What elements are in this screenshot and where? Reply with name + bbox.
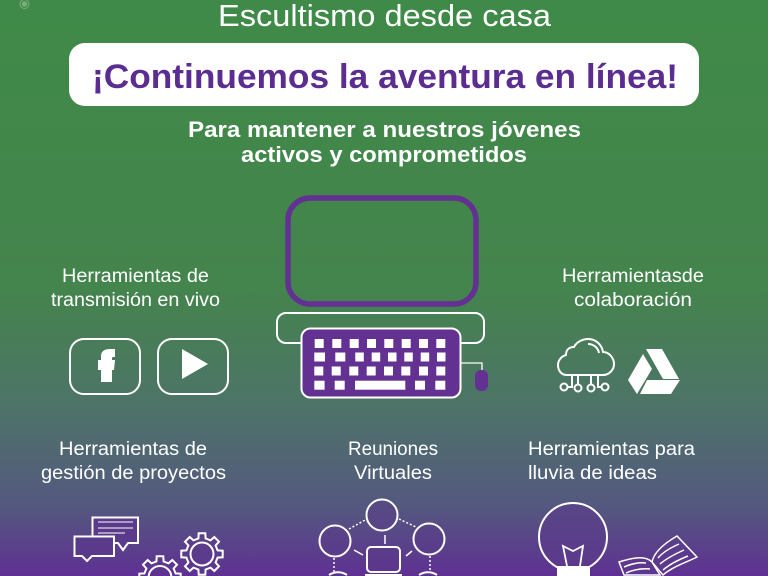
- mouse: [475, 370, 488, 391]
- keyboard: [302, 328, 460, 398]
- mouse cable: [461, 363, 482, 371]
- icon: light bulb: [539, 503, 607, 576]
- label: virtual meetings: Reuniones: [348, 439, 438, 460]
- icon: cloud network: [558, 339, 614, 392]
- section: collaboration tools: [558, 266, 704, 394]
- icon: people network: [320, 500, 444, 575]
- headline banner: [69, 43, 699, 106]
- icon: video play: [158, 339, 228, 394]
- icon: facebook: [70, 339, 140, 394]
- section: virtual meetings: [320, 439, 444, 575]
- section: project management tools: [41, 439, 226, 576]
- label: collaboration: colaboración: [574, 290, 692, 311]
- label: brainstorming: lluvia de ideas: [528, 463, 657, 484]
- label: collaboration: [562, 266, 704, 311]
- subtitle: [188, 117, 581, 167]
- monitor: [288, 198, 476, 304]
- label: live streaming: Herramientas de: [62, 266, 209, 287]
- section: brainstorming tools: [528, 439, 697, 576]
- label: virtual meetings: [348, 439, 438, 484]
- label: brainstorming: [528, 439, 695, 484]
- icon: drive: [628, 349, 680, 394]
- label: project management: Herramientas de: [59, 439, 207, 460]
- monitor stand tray: [277, 313, 484, 343]
- icon: chat bubbles: [74, 518, 138, 561]
- label: live streaming: transmisión en vivo: [51, 290, 220, 311]
- subtitle: Para mantener a nuestros jóvenes: [188, 117, 581, 142]
- label: project management: gestión de proyectos: [41, 463, 226, 484]
- icon: gears: [139, 533, 223, 576]
- headline banner: ¡Continuemos la aventura en línea!: [92, 58, 678, 96]
- logo mark top left: [20, 0, 29, 8]
- label: live streaming: [51, 266, 220, 311]
- icon: open book: [619, 536, 697, 575]
- section: live streaming tools: [51, 266, 228, 394]
- label: project management: [41, 439, 226, 484]
- subtitle: activos y comprometidos: [241, 142, 527, 167]
- label: virtual meetings: Virtuales: [354, 463, 432, 484]
- label: brainstorming: Herramientas para: [528, 439, 695, 460]
- icon: computer: [277, 198, 488, 398]
- label: collaboration: Herramientasde: [562, 266, 704, 287]
